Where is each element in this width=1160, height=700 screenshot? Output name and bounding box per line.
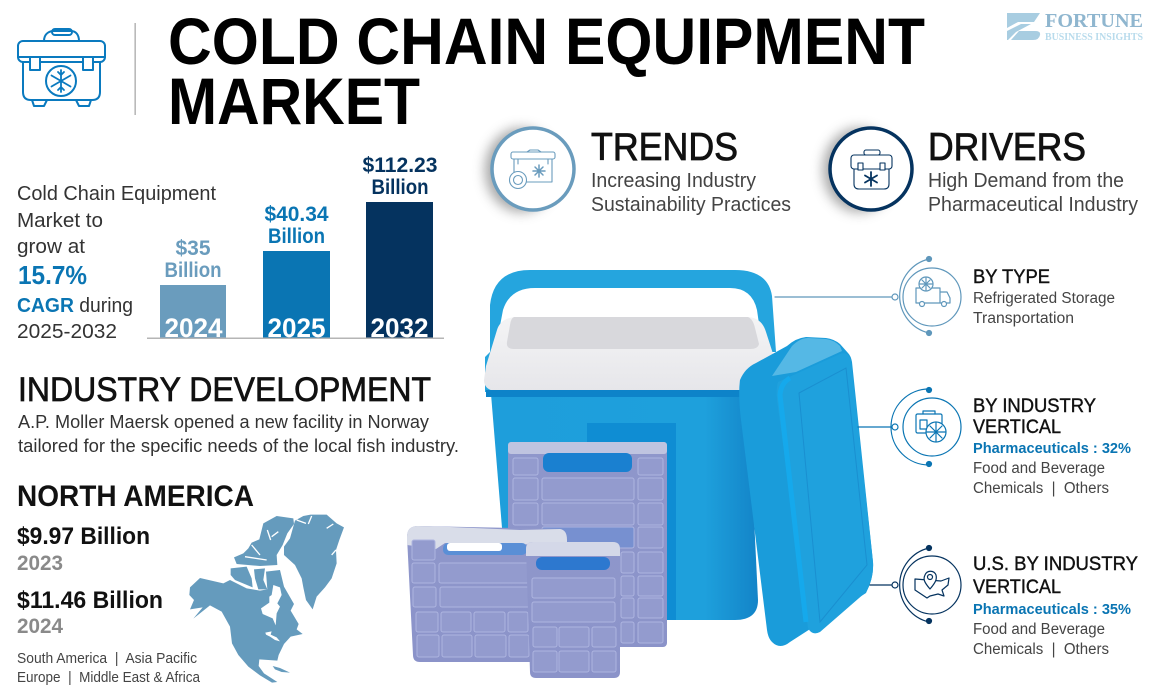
- text: drivers: [928, 170, 1138, 216]
- icon: cooler box logo: [18, 29, 105, 106]
- heading: U.S. by industry vertical: VERTICAL: [973, 577, 1061, 598]
- bar 2024: [160, 237, 226, 343]
- ice pack: front: [526, 542, 620, 678]
- ice pack: back: [508, 442, 667, 647]
- heading: by industry vertical: VERTICAL: [973, 417, 1061, 438]
- text: CAGR summary: grow at: [17, 235, 85, 258]
- bar 2024: 2024: [164, 313, 222, 343]
- heading: drivers: DRIVERS: [928, 126, 1086, 169]
- text: by industry vertical items: [973, 440, 1131, 497]
- heading: by industry vertical: BY INDUSTRY: [973, 396, 1096, 417]
- bar 2025: $40.34: [264, 203, 329, 226]
- text: trends: [591, 170, 791, 216]
- stat: 2023: [17, 523, 150, 575]
- icon: US map pin: [870, 546, 961, 624]
- cooler handle: [485, 270, 776, 392]
- cooler label panel: [587, 423, 676, 620]
- stat: 2023: $9.97 Billion: [17, 523, 150, 550]
- title: [168, 4, 925, 138]
- bar chart: [147, 154, 444, 343]
- icon: vertical: [858, 388, 961, 466]
- stat: 2024: $11.46 Billion: [17, 587, 163, 614]
- bar 2025: Billion: [268, 225, 325, 248]
- title: MARKET: [168, 64, 420, 138]
- text: CAGR summary: 2025-2032: [17, 320, 117, 343]
- divider: [134, 23, 136, 115]
- panel: by industry vertical: [858, 388, 1131, 497]
- heading: industry development: INDUSTRY DEVELOPMENT: [18, 371, 431, 409]
- bar 2024: Billion: [164, 259, 222, 282]
- text: by type items: Transportation: [973, 310, 1074, 327]
- text: CAGR summary: 15.7%: [18, 260, 87, 290]
- text: other regions: South America | Asia Pacific: [17, 651, 197, 667]
- illustration: cooler with ice packs: [407, 270, 873, 678]
- bar 2025: 2025: [268, 313, 326, 343]
- text: other regions: [17, 651, 201, 686]
- heading: U.S. by industry vertical: [973, 554, 1138, 598]
- stat: 2024: 2024: [17, 615, 63, 638]
- panel: trends: [485, 126, 791, 216]
- text: by type items: [973, 290, 1115, 327]
- text: U.S. vertical items: Pharmaceuticals : 35%: [973, 601, 1131, 618]
- logo: Fortune Business Insights: BUSINESS INSIGHTS: [1045, 32, 1143, 43]
- heading: U.S. by industry vertical: U.S. BY INDUSTRY: [973, 554, 1138, 575]
- panel: U.S. by industry vertical: [870, 546, 1138, 658]
- text: U.S. vertical items: [973, 601, 1131, 658]
- icon: trends circle: [485, 128, 574, 212]
- text: by industry vertical items: Food and Beverage: [973, 460, 1105, 477]
- bar 2032: Billion: [372, 176, 428, 199]
- text: CAGR summary: Market to: [17, 209, 103, 232]
- ice pack: left: [407, 526, 567, 662]
- stat: 2024: [17, 587, 163, 638]
- icon: drivers circle: [823, 128, 912, 212]
- logo: Fortune Business Insights: [1007, 10, 1143, 43]
- heading: North America: NORTH AMERICA: [17, 480, 254, 513]
- stat: 2023: 2023: [17, 552, 63, 575]
- icon: refrigerated truck: [775, 256, 961, 336]
- map: North America: [189, 515, 344, 683]
- heading: by type: BY TYPE: [973, 267, 1050, 288]
- logo: Fortune Business Insights: FORTUNE: [1045, 10, 1143, 32]
- text: CAGR summary: Cold Chain Equipment: [17, 182, 216, 205]
- cooler rim: [484, 317, 775, 392]
- heading: by industry vertical: [973, 396, 1096, 438]
- text: industry development: A.P. Moller Maersk opened a new facility in Norway: [18, 411, 430, 432]
- text: CAGR summary: CAGR during: [17, 294, 133, 317]
- bar 2032: 2032: [370, 313, 428, 343]
- bar 2032: [362, 154, 438, 343]
- title: COLD CHAIN EQUIPMENT: [168, 4, 925, 78]
- text: industry development: [18, 411, 459, 456]
- cooler opening: [507, 317, 759, 349]
- text: other regions: Europe | Middle East & Africa: [17, 670, 201, 686]
- text: by type items: Refrigerated Storage: [973, 290, 1115, 307]
- text: drivers: Pharmaceutical Industry: [928, 194, 1138, 216]
- text: trends: Sustainability Practices: [591, 194, 791, 216]
- heading: trends: TRENDS: [591, 126, 738, 169]
- bar 2025: [263, 203, 330, 343]
- panel: North America: [17, 480, 344, 686]
- bar 2024: $35: [175, 237, 211, 260]
- text: by industry vertical items: Pharmaceuticals : 32%: [973, 440, 1131, 457]
- text: drivers: High Demand from the: [928, 170, 1124, 192]
- text: trends: Increasing Industry: [591, 170, 756, 192]
- text: U.S. vertical items: Chemicals | Others: [973, 641, 1109, 658]
- text: CAGR summary: [17, 182, 216, 343]
- panel: by type: [775, 256, 1115, 336]
- text: U.S. vertical items: Food and Beverage: [973, 621, 1105, 638]
- panel: drivers: [823, 126, 1138, 216]
- cooler body: [491, 394, 758, 620]
- bar 2032: $112.23: [362, 154, 438, 177]
- cooler lid: [739, 337, 873, 646]
- text: by industry vertical items: Chemicals | Others: [973, 480, 1109, 497]
- text: industry development: tailored for the specific needs of the local fish industry.: [18, 435, 459, 456]
